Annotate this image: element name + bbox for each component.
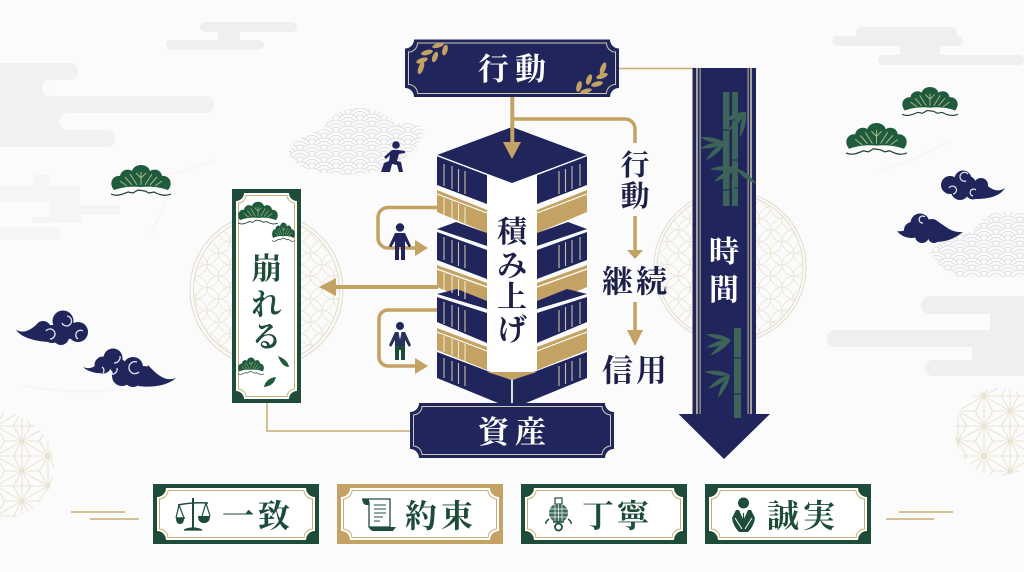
top face	[437, 127, 587, 183]
leaves: top left	[416, 42, 449, 75]
label: 積み上げ: 積	[497, 216, 531, 249]
label: 時間: 間	[709, 274, 739, 307]
value plate: 一致	[153, 484, 319, 544]
falling leaves	[264, 356, 289, 387]
label: 崩れる: る	[252, 321, 282, 354]
plate: 資産	[410, 403, 614, 458]
bamboo: lower	[704, 328, 741, 418]
gold base wedge	[487, 372, 537, 380]
branch arrow: 行動 to label	[512, 119, 635, 143]
left side blocks	[437, 156, 511, 403]
white centre strip	[487, 175, 537, 372]
bamboo: upper	[699, 92, 758, 206]
icon: scales	[176, 498, 210, 530]
label: 行動: 行動	[478, 52, 546, 87]
asanoha circle: bottom right	[955, 388, 1024, 476]
label: 積み上げ: 上	[497, 281, 527, 314]
asanoha circle: bottom left	[0, 413, 54, 519]
arrow: 行動 to 継続	[627, 216, 643, 259]
left gold block ticks	[444, 198, 465, 361]
shippo circle: left	[190, 214, 343, 366]
connector: 行動 to 時間	[619, 68, 694, 70]
label: 時間: 時	[709, 236, 739, 269]
washi texture	[22, 140, 950, 392]
label: 誠実: 誠実	[767, 498, 835, 534]
person: suit	[389, 322, 411, 360]
person: climbing	[381, 141, 405, 172]
plate: 行動	[405, 40, 619, 97]
label: 行動 vertical	[620, 149, 650, 213]
value plate: 約束	[337, 484, 503, 544]
loop arrow: upper	[378, 208, 437, 256]
right side blocks	[513, 156, 587, 403]
arrow: 継続 to 信用	[627, 302, 643, 346]
connector: 崩れる to 資産	[267, 403, 411, 431]
pine: panel small	[272, 223, 295, 241]
label: 崩れる	[252, 253, 282, 354]
decoration: right lines	[886, 512, 953, 519]
label: 丁寧: 丁寧	[582, 498, 649, 534]
value plate: 誠実	[705, 484, 871, 544]
centre seam	[511, 380, 513, 403]
kasumi cloud: top left	[166, 22, 297, 50]
label: 約束: 約束	[405, 498, 473, 534]
label: 崩れる: れ	[252, 289, 282, 322]
stack: 積み上げ tower	[437, 127, 587, 403]
person: standing	[389, 223, 411, 260]
label: 崩れる: 崩	[252, 253, 282, 286]
cloud: right upper	[941, 170, 1005, 200]
arrow: stack to 崩れる	[319, 278, 438, 296]
icon: scroll	[362, 499, 396, 531]
label: 信用: 信用	[602, 354, 667, 388]
pine: panel bottom	[238, 358, 264, 374]
kasumi cloud: large left	[0, 63, 214, 147]
time arrow	[678, 68, 770, 459]
icon: bowing person	[732, 498, 755, 532]
label: 資産: 資産	[478, 415, 546, 450]
cloud: left upper	[16, 310, 88, 345]
seigaiha wave: right	[930, 212, 1024, 277]
label: 積み上げ: み	[497, 250, 527, 283]
pine: right lower	[846, 123, 907, 154]
label: 行動 vertical: 行	[620, 149, 650, 182]
seigaiha wave: centre	[288, 108, 425, 175]
loop arrow: lower	[379, 310, 437, 374]
label: 積み上げ	[497, 216, 531, 347]
label: 一致: 一致	[222, 498, 290, 534]
kasumi cloud: mid right	[827, 296, 1024, 376]
kasumi cloud: top right	[832, 27, 1024, 65]
panel: 崩れる	[232, 189, 301, 403]
shippo circle: right	[654, 191, 806, 343]
value plate: 丁寧	[521, 484, 687, 544]
label: 行動 vertical: 動	[620, 180, 650, 213]
pine: left	[111, 165, 171, 195]
label: 積み上げ: げ	[497, 314, 527, 347]
label: 継続: 継続	[602, 264, 667, 300]
decoration: left lines	[71, 512, 139, 519]
icon: netsuke	[546, 498, 571, 530]
cloud: right lower	[897, 214, 963, 243]
leaves: bottom right	[575, 62, 608, 95]
arrow: 行動 down to stack	[503, 97, 521, 159]
cloud: left lower	[83, 348, 176, 387]
label: 時間	[709, 236, 739, 307]
pine: panel top	[238, 202, 278, 224]
pine: right upper	[902, 87, 958, 115]
kasumi cloud: faded left	[0, 175, 120, 240]
